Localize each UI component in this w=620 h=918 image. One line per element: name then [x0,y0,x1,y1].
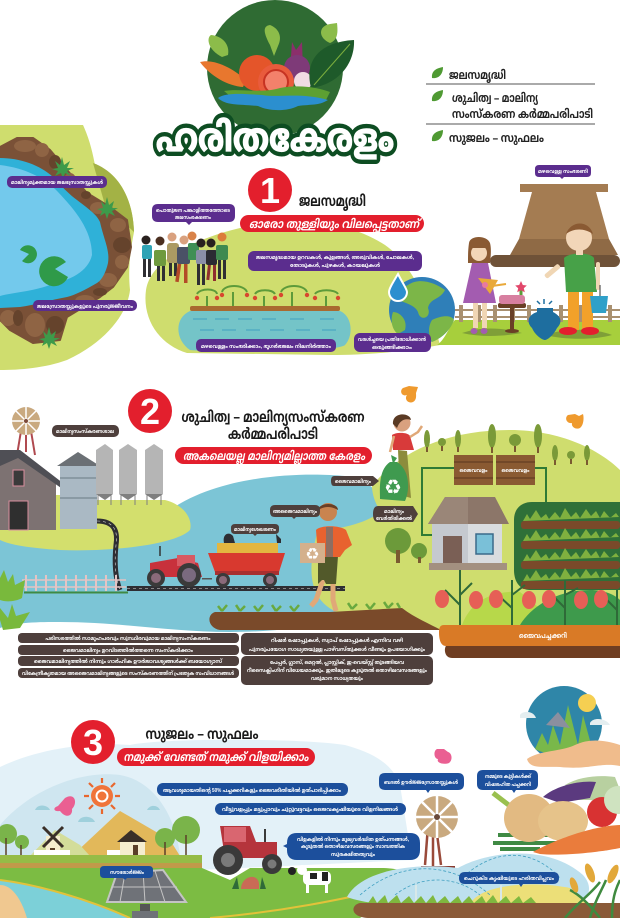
cottage with windmill [34,827,145,855]
water tank pool [178,311,351,352]
vegetables basket [493,776,620,855]
info labels left: ജൈവമാലിന്യത്തിൽ നിന്നും ഗാർഹിക ഊർജാവശ്യങ്ങൾക്ക് ബയോഗ്യാസ് [34,658,223,665]
organic vegetable bed [439,625,620,658]
legend item 1: ജലസമൃദ്ധി [449,68,506,84]
slogan pill 1 [240,215,424,232]
trees [0,816,200,855]
rainwater tank [490,184,620,267]
yellow green field [0,495,191,550]
tractor red [213,826,282,875]
speech: crops income [283,833,420,860]
central green land [145,222,440,355]
speech: safe vegetables: നമ്മുടെ കുട്ടികൾക്ക് [485,773,532,780]
heading badge 3 [71,720,115,764]
info labels right [241,633,433,685]
label: organic waste [331,476,379,486]
label: drought: ഒരുങ്ങിക്കാം [372,344,412,351]
speech: public participation: പൊതുജന പങ്കാളിത്തത്തോടെ [156,207,231,214]
label: streams and rivers: തോടുകൾ, പുഴകൾ, കായലുകൾ [290,262,381,269]
heading 1: ജലസമൃദ്ധി [299,193,366,211]
heading 2: കർമ്മപരിപാടി [228,426,318,443]
tomato plants [195,286,340,306]
info labels left: വികേന്ദ്രീകൃതമായ അജൈവമാലിന്യങ്ങളുടെ സംസ്കരണത്തിന് പ്രത്യേക സംവിധാനങ്ങൾ [22,670,235,677]
label: rainwater harvesting [196,339,336,352]
heading 3: സുജലം – സുഫലം [146,726,259,743]
pond rocks [0,138,131,343]
pond water [0,158,108,308]
globe in hand [520,686,620,768]
label: streams and rivers: ജലസമൃദ്ധമായ ഉറവകൾ, കുളങ്ങൾ, അരുവികൾ, ചോലകൾ, [256,254,414,261]
info labels right: റീസൈക്ലിംഗിന് വിധേയമാക്കും. ഇതിലൂടെ കൂടുതൽ തൊഴിലവസരങ്ങളും [247,667,427,674]
label: waste plant: മാലിന്യസംസ്കരണശാല [56,428,114,435]
green recycling bag: ♻ [385,479,401,496]
soil bed right [353,895,620,918]
pond land [0,125,134,370]
info labels left [18,633,239,678]
speech: renewable energy [379,773,464,793]
butterfly orange 2 [566,414,584,429]
label: inorganic waste [270,505,320,519]
label: waste segregation: മാലിന്യം [384,508,404,515]
label: waste collection: മാലിന്യശേഖരണം [234,526,276,533]
speech: rainwater tank: മഴവെള്ള സംഭരണി [538,168,588,175]
slogan pill 2 [175,447,372,465]
picket fence [22,575,128,592]
mountains [72,811,180,856]
heading 2 [182,409,364,443]
panel: section 3 sujalam sufalam [0,686,620,918]
green field [0,868,420,918]
ground shadows [462,328,612,339]
organic compost boxes: ജൈവവളം [460,468,488,474]
inner sky hill [0,774,180,856]
small clouds [35,805,160,822]
heading 2: ശുചിത്വ – മാലിന്യസംസ്കരണ [182,409,364,426]
label: streams and rivers [248,251,422,271]
speech: solar power: സൗരോർജ്ജം [110,869,144,876]
heading badge 1 [248,168,292,212]
windmill [12,407,40,455]
butterfly pink right [434,749,452,764]
man holding recycling box [300,503,352,611]
ground strip [437,320,620,345]
info labels right: പേപ്പർ, ഗ്ലാസ്, മെറ്റൽ, പ്ലാസ്റ്റിക്, ഇ-വെയ്സ്റ്റ് തുടങ്ങിയവ [270,659,404,666]
legend leaf 1 [432,67,443,78]
speech: fertigation: ചെറുകിട കൃഷിയുടെ ഹരിതവിപ്ലവം [464,875,554,882]
three grain silos [96,444,163,505]
vegetable garden panel [514,502,620,590]
speech: safe vegetables: വിഷരഹിത പച്ചക്കറി [485,781,531,788]
info labels right: പുനരുപയോഗ സാധ്യതയുള്ള പാഴ്‌വസ്തുക്കൾ വീണ്ടും ഉപയോഗിക്കും [249,646,425,653]
label: clean water sources: മാലിന്യമുക്തമായ ജലസ്രോതസ്സുകൾ [11,179,104,186]
barn [0,450,68,530]
label: water source revival [33,300,137,311]
label: water source revival: ജലസ്രോതസ്സുകളുടെ പുനരുജ്ജീവനം [37,303,133,310]
river [0,880,130,918]
winding road [97,521,345,590]
info labels right: റിഷർ ഷോപ്പുകൾ, സ്വാപ് ഷോപ്പുകൾ എന്നിവ വഴി [271,637,403,644]
panel: section 2 waste management [0,386,620,685]
landscape strip [0,855,202,868]
label: home gardens [215,803,406,815]
heading badge 3: 3 [83,722,103,763]
round silo [57,452,100,529]
sun [84,778,120,814]
small distant trees [424,424,590,465]
label: waste segregation [373,506,418,522]
globe with water drop [389,274,455,343]
organic compost boxes [422,455,546,535]
green recycling bag [380,455,408,501]
boy with bucket [544,224,608,335]
label: waste segregation: വേർതിരിക്കൽ [376,515,413,522]
pond plants [39,157,118,349]
title: ഹരിതകേരളം [156,117,394,160]
speech: fertigation [459,872,559,887]
grass tufts [0,570,30,630]
label: inorganic waste: അജൈവമാലിന്യം [273,508,317,515]
man holding recycling box: ♻ [306,547,319,561]
info labels right: വരുമാന സാധ്യതയും [311,676,363,682]
lily pad large [39,256,68,286]
label: waste collection [231,524,279,536]
speech: safe vegetables [477,770,538,793]
cow [288,865,331,893]
title: ഹരിതകേരളം [156,117,394,160]
solar panel [107,870,186,918]
panel: section 1 water abundance [0,125,620,370]
house [428,497,509,570]
label: organic waste: ജൈവമാലിന്യം [335,478,371,485]
people group [142,232,228,285]
heading badge 2 [128,389,172,433]
lily pad small [20,245,37,263]
blue water pot [529,299,560,340]
tomato plants foreground [435,570,617,625]
label: clean water sources [7,176,107,188]
soil bed [190,306,340,311]
speech: rainwater tank [535,165,591,179]
legend item 3: സുജലം – സുഫലം [449,131,544,146]
blue patch by hill [318,476,376,530]
label: vegetables 50 percent: ആവശ്യമായതിന്റെ 50% പച്ചക്കറികളും ജൈവരീതിയിൽ ഉത്പാദിപ്പിക്കാം [163,787,341,794]
pale blue sky hills [0,740,412,870]
slogan pill 3: നമുക്ക് വേണ്ടത് നമുക്ക് വിളയിക്കാം [124,750,309,764]
woman with bag [390,414,422,498]
speech: solar power [100,866,153,880]
label: vegetables 50 percent [157,783,348,796]
heading badge 1: 1 [260,170,280,211]
butterfly orange 1 [401,386,418,402]
butterfly pink [54,796,75,816]
table with flowers [498,281,527,333]
slogan pill 3 [117,748,315,766]
label: waste plant [52,425,119,437]
red barn icon [232,877,266,889]
legend leaf 2 [432,90,443,101]
speech: renewable energy: ബദൽ ഊർജ്ജസ്രോതസ്സുകൾ [384,779,459,786]
label: drought: വരൾച്ചയെ പ്രതിരോധിക്കാൻ [358,336,426,343]
legend item 2 line 1: ശുചിത്വ – മാലിന്യ [452,91,538,106]
green hill [311,430,620,630]
speech: crops income: വിളകളിൽ നിന്നും മൂല്യവർദ്ധിത ഉത്പന്നങ്ങൾ, [297,836,409,843]
girl with watering can [463,237,506,334]
label: rainwater harvesting: മഴവെള്ളം സംഭരിക്കാം, ഭൂഗർഭജലം നിലനിർത്താം [201,343,331,350]
speech: crops income: സുരക്ഷിതത്വവും [331,851,375,858]
speech: crops income: കൂടുതൽ തൊഴിലവസരങ്ങളും സാമ്പത്തിക [301,843,406,850]
speech: public participation [152,204,235,225]
speech: public participation: ജലസംരക്ഷണം [175,215,211,221]
blue water land [0,475,385,632]
cattail grass [565,862,620,918]
label: drought [354,333,431,352]
slogan pill 2: അകലെയല്ല മാലിന്യമില്ലാത്ത കേരളം [183,449,366,465]
heading badge 2: 2 [140,391,160,432]
sand bank [0,885,27,918]
label: home gardens: വീട്ടുവളപ്പും മട്ടുപ്പാവും ചുറ്റുവട്ടവും ജൈവകൃഷിയുടെ വിളനിലങ്ങൾ [222,806,399,813]
fence [455,305,620,322]
info labels left: പരിസരത്തിൽ സാമൂഹപരവും സുസ്ഥിരവുമായ മാലിന്യസംസ്കരണം [46,635,211,642]
foreground mounds [462,590,620,625]
soil strip with seedlings [209,602,441,630]
legend leaf 3 [432,130,443,141]
organic vegetable bed: ജൈവപച്ചക്കറി [519,632,567,640]
logo: vegetables and water [200,0,354,136]
info labels left: ജൈവമാലിന്യം ഉറവിടത്തിൽത്തന്നെ സംസ്കരിക്കാം [63,647,193,654]
sprinkler field [347,853,590,904]
windmill right [416,796,458,867]
organic compost boxes: ജൈവവളം [502,468,530,474]
slogan pill 1: ഓരോ തുള്ളിയും വിലപ്പെട്ടതാണ് [249,217,422,232]
trailer with waste [202,534,285,587]
small house [117,830,147,855]
legend [426,67,595,146]
tractor [147,546,202,587]
round trees [385,528,427,563]
